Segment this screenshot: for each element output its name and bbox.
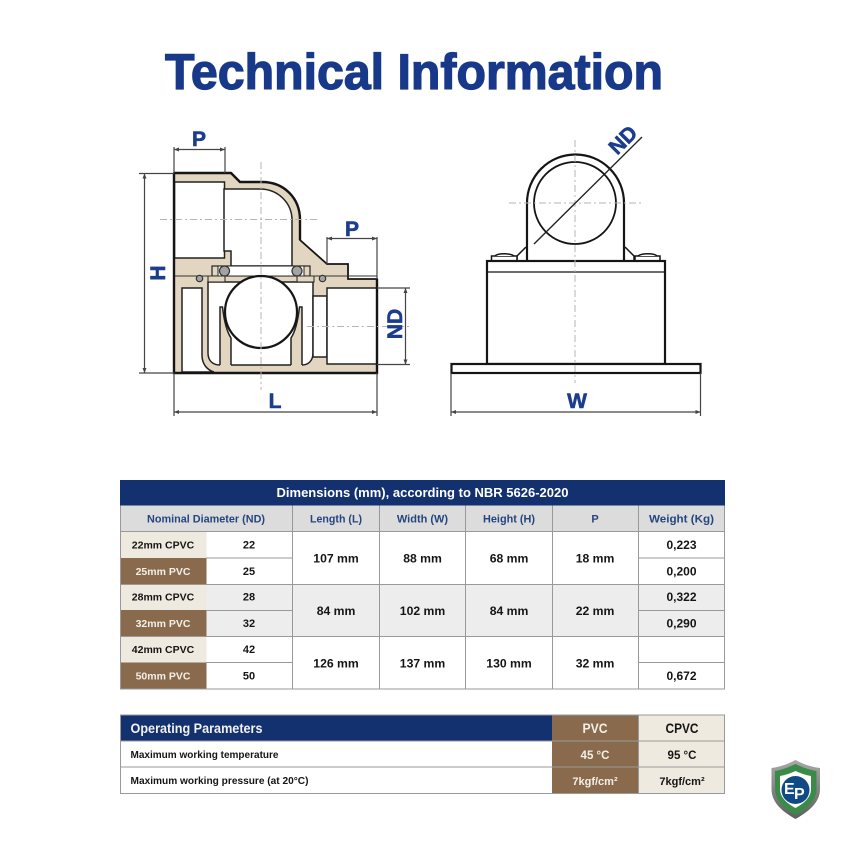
P values: 32 mm: [576, 656, 614, 670]
dimension L: [174, 373, 377, 416]
material cells: 22mm CPVC: [132, 540, 195, 552]
length values: 84 mm: [317, 604, 355, 618]
pressure row: 7kgf/cm²: [572, 776, 618, 788]
nominal diameter values: 28: [243, 592, 255, 604]
column headings: Height (H): [483, 514, 535, 526]
P values: [576, 552, 614, 670]
logo: EP shield: P: [794, 786, 805, 803]
dimension H: H: [147, 265, 170, 281]
pressure row: Maximum working pressure (at 20°C): [130, 775, 308, 787]
column headings: Width (W): [397, 514, 448, 526]
weight values: 0,290: [666, 616, 697, 630]
row bands: [206, 584, 725, 636]
material cells: 42mm CPVC: [132, 644, 195, 656]
column headings: Nominal Diameter (ND): [147, 514, 265, 526]
dimension P top: [174, 128, 225, 173]
nominal diameter values: [243, 540, 255, 682]
O-ring seals: [196, 266, 326, 282]
height values: 130 mm: [486, 656, 532, 670]
material cells: 25mm PVC: [136, 566, 191, 578]
width values: 88 mm: [403, 552, 442, 566]
header row: PVC: [582, 721, 608, 736]
logo: EP shield: E: [784, 781, 795, 798]
header row: [120, 715, 725, 741]
saddle and pipe opening: [517, 154, 634, 262]
nominal diameter values: 22: [243, 540, 255, 552]
length values: [313, 552, 359, 670]
base plate: [452, 364, 700, 373]
nominal diameter values: 42: [243, 644, 255, 656]
diagram: side section view: [139, 128, 410, 416]
table: operating parameters: [120, 715, 725, 794]
column headings: Weight (Kg): [649, 514, 714, 526]
logo: EP shield: [772, 760, 820, 819]
temperature row: 95 °C: [668, 750, 696, 762]
header row: Operating Parameters: [130, 721, 262, 736]
dimension P right: P: [345, 218, 359, 241]
height values: 84 mm: [490, 604, 528, 618]
nominal diameter values: 25: [243, 566, 255, 578]
dimension ND: [377, 288, 410, 364]
nominal diameter values: 32: [243, 618, 255, 630]
height values: [486, 552, 532, 670]
weight values: 0,322: [666, 590, 697, 604]
title: Technical Information: [165, 44, 663, 100]
length values: 126 mm: [313, 656, 359, 670]
width values: [400, 552, 445, 670]
dimension L: L: [269, 390, 282, 413]
weight values: [666, 538, 697, 683]
column headings: P: [591, 514, 599, 526]
weight values: 0,223: [666, 538, 697, 552]
dimension W: W: [567, 390, 587, 413]
center lines: [160, 162, 410, 390]
dimension ND: ND: [384, 309, 407, 339]
nominal diameter values: 50: [243, 670, 255, 682]
bolts: [492, 254, 660, 261]
dimension H: [139, 174, 174, 373]
temperature row: Maximum working temperature: [130, 749, 279, 761]
temperature row: 45 °C: [581, 750, 609, 762]
dimension ND diagonal: [534, 122, 642, 244]
column headings: [120, 506, 725, 532]
weight values: 0,200: [666, 564, 697, 578]
width values: 137 mm: [400, 656, 445, 670]
center lines: [509, 140, 643, 383]
table: dimensions: [120, 480, 725, 690]
column headings: Length (L): [310, 514, 362, 526]
length values: 107 mm: [313, 552, 359, 566]
header row: CPVC: [666, 721, 699, 736]
dimension P top: P: [192, 128, 206, 151]
dimension W: [451, 373, 700, 416]
material cells: 28mm CPVC: [132, 592, 195, 604]
fitting body section: [174, 173, 377, 373]
pressure row: 7kgf/cm²: [659, 776, 705, 788]
height values: 68 mm: [490, 552, 528, 566]
material cells: 32mm PVC: [136, 618, 191, 630]
P values: 22 mm: [576, 604, 614, 618]
diagram: front view: [451, 122, 700, 416]
housing box: [487, 261, 665, 364]
dimension P right: [327, 218, 377, 279]
temperature row: [130, 741, 725, 767]
pipe circle: [225, 276, 297, 348]
weight values: 0,672: [666, 669, 697, 683]
width values: 102 mm: [400, 604, 445, 618]
pressure row: [130, 767, 725, 794]
material cells: [120, 532, 206, 689]
dimension ND diagonal: ND: [605, 122, 642, 159]
material cells: 50mm PVC: [136, 670, 191, 682]
table header: [120, 480, 725, 506]
table header: Dimensions (mm), according to NBR 5626-2020: [276, 486, 569, 500]
P values: 18 mm: [576, 552, 614, 566]
